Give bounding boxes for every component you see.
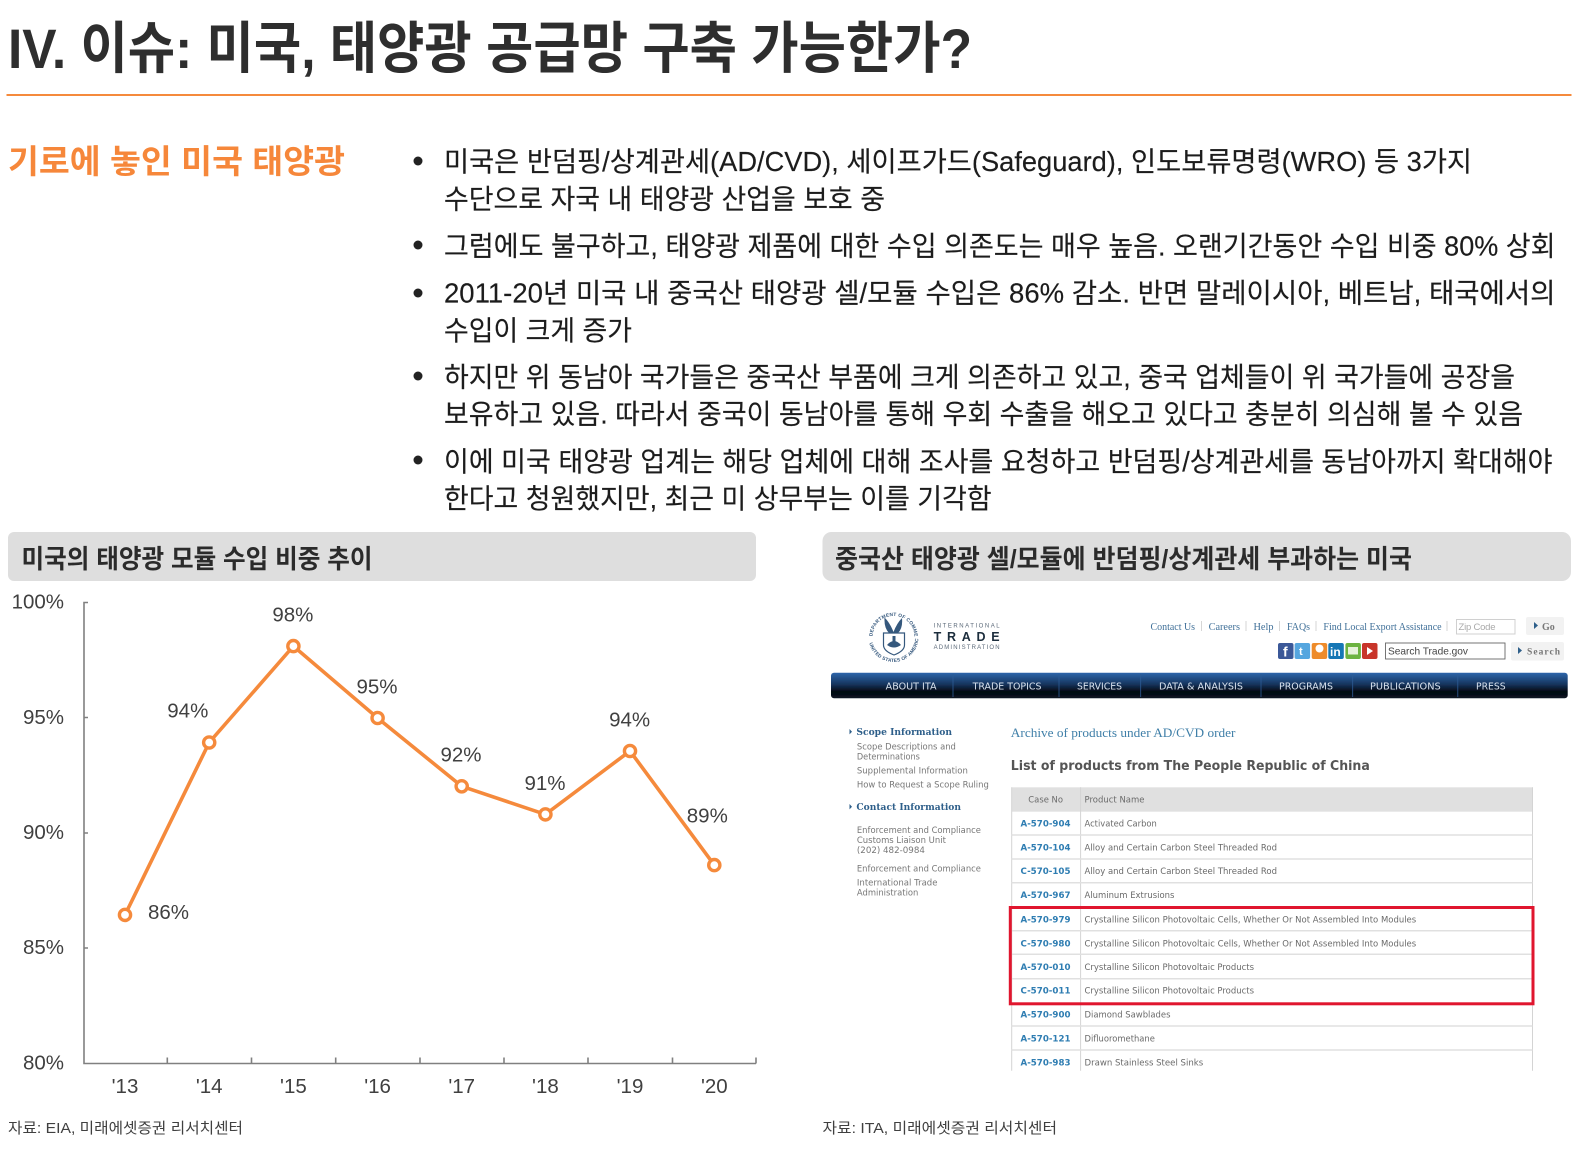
data labels: 86% [148, 901, 189, 924]
data labels: 92% [440, 744, 482, 766]
bullet 1: 미국은 반덤핑/상계관세(AD/CVD), 세이프가드(Safeguard), 인도보류명령(WRO) 등 3가지 [444, 146, 1472, 177]
y axis labels: 100% [12, 590, 64, 613]
table rows: Alloy and Certain Carbon Steel Threaded Rod [1084, 843, 1277, 853]
panel heading: left: 미국의 태양광 모듈 수입 비중 추이 [22, 544, 372, 574]
table rows: C-570-011 [1020, 987, 1070, 997]
data labels: 94% [167, 699, 208, 722]
table rows: Drawn Stainless Steel Sinks [1084, 1058, 1204, 1068]
bullet 1: 수단으로 자국 내 태양광 산업을 보호 중 [444, 183, 885, 214]
products table: Case No [1028, 795, 1063, 805]
icon: department of commerce seal: DEPARTMENT OF COMMERCE [869, 612, 918, 636]
data labels: 91% [524, 772, 566, 795]
search button [1511, 642, 1564, 660]
sidebar: Contact Information [856, 802, 961, 813]
bullet 3: 2011-20년 미국 내 중국산 태양광 셀/모듈 수입은 86% 감소. 반면 말레이시아, 베트남, 태국에서의 [444, 278, 1556, 308]
y axis labels [12, 590, 64, 1074]
x axis labels: '15 [280, 1075, 307, 1098]
sidebar: Scope Descriptions and [857, 743, 956, 753]
x axis labels: '20 [701, 1075, 728, 1098]
navigation bar: PROGRAMS [1279, 682, 1333, 692]
ITA logo [830, 612, 1000, 676]
top links [1150, 621, 1447, 633]
bullet 3: 수입이 크게 증가 [444, 315, 632, 346]
x axis labels: '18 [532, 1075, 559, 1098]
red highlight box [1010, 908, 1533, 1004]
subheading: orange: 기로에 놓인 미국 태양광 [8, 143, 345, 180]
table rows: Activated Carbon [1084, 819, 1157, 829]
bullet 4: 하지만 위 동남아 국가들은 중국산 부품에 크게 의존하고 있고, 중국 업체들이 위 국가들에 공장을 [444, 362, 1515, 393]
sidebar: Administration [857, 889, 918, 899]
bullet 4: 보유하고 있음. 따라서 중국이 동남아를 통해 우회 수출을 해오고 있다고 충분히 의심해 볼 수 있음 [444, 398, 1523, 429]
social icons: in [1330, 645, 1341, 659]
table rows: Alloy and Certain Carbon Steel Threaded Rod [1084, 867, 1277, 877]
panel: left chart [8, 532, 756, 1137]
top links: Contact Us [1150, 622, 1195, 633]
x axis labels: '14 [196, 1075, 223, 1098]
line chart [12, 590, 756, 1098]
sidebar: Scope Information [856, 727, 952, 738]
top links: Help [1254, 622, 1274, 633]
top links: Careers [1209, 622, 1240, 633]
zip code field [1456, 620, 1515, 634]
navigation bar: ABOUT ITA [886, 682, 937, 692]
bullet 5: 한다고 청원했지만, 최근 미 상무부는 이를 기각함 [444, 483, 992, 514]
table rows: A-570-979 [1020, 915, 1070, 925]
navigation bar: SERVICES [1077, 682, 1122, 692]
x axis labels: '19 [617, 1075, 643, 1098]
y axis labels: 90% [23, 821, 64, 844]
navigation bar: PRESS [1476, 682, 1506, 692]
source note: left: 자료: EIA, 미래에셋증권 리서치센터 [8, 1120, 243, 1137]
x axis labels: '17 [448, 1075, 475, 1098]
social icons: f [1283, 644, 1288, 660]
ITA wordmark: INTERNATIONAL [934, 624, 1000, 630]
table rows: Crystalline Silicon Photovoltaic Cells, Whether Or Not Assembled Into Modules [1084, 939, 1417, 949]
navigation bar [831, 673, 1568, 698]
go button [1526, 617, 1564, 635]
ITA wordmark: ADMINISTRATION [934, 645, 1000, 651]
y axis labels: 80% [23, 1052, 64, 1074]
archive heading: Archive of products under AD/CVD order [1011, 726, 1236, 740]
x axis labels: '13 [112, 1075, 138, 1098]
sidebar: Enforcement and Compliance [857, 826, 981, 836]
products table: Product Name [1084, 795, 1144, 805]
zip code field: Zip Code [1458, 622, 1496, 633]
table rows: A-570-104 [1020, 843, 1070, 853]
table rows: Crystalline Silicon Photovoltaic Products [1084, 987, 1254, 997]
title rule [6, 94, 1572, 96]
top links: Find Local Export Assistance [1323, 622, 1442, 633]
sidebar: International Trade [857, 879, 938, 889]
social icons [1278, 643, 1378, 660]
bullet list [414, 146, 1556, 514]
x axis labels [112, 1075, 728, 1098]
sidebar: How to Request a Scope Ruling [857, 781, 989, 791]
table rows: Diamond Sawblades [1084, 1011, 1171, 1021]
table rows: A-570-904 [1020, 819, 1070, 829]
panel heading: right [822, 532, 1571, 581]
x axis labels: '16 [364, 1075, 391, 1098]
social icons: t [1299, 646, 1303, 658]
go button: Go [1542, 622, 1555, 633]
data markers [119, 640, 720, 921]
panel heading: right: 중국산 태양광 셀/모듈에 반덤핑/상계관세 부과하는 미국 [835, 544, 1412, 574]
table rows: Crystalline Silicon Photovoltaic Cells, Whether Or Not Assembled Into Modules [1084, 915, 1417, 925]
table rows: A-570-983 [1020, 1058, 1070, 1068]
source note: right: 자료: ITA, 미래에셋증권 리서치센터 [822, 1120, 1057, 1137]
data labels: 89% [687, 804, 728, 828]
top links: FAQs [1287, 622, 1310, 633]
ITA wordmark [934, 624, 1000, 651]
bullet 2: 그럼에도 불구하고, 태양광 제품에 대한 수입 의존도는 매우 높음. 오랜기간동안 수입 비중 80% 상회 [444, 230, 1556, 261]
table rows: Difluoromethane [1084, 1034, 1155, 1044]
sidebar: Customs Liaison Unit [857, 836, 947, 846]
navigation bar: DATA & ANALYSIS [1159, 682, 1243, 692]
table rows: C-570-980 [1020, 939, 1070, 949]
table rows: Crystalline Silicon Photovoltaic Products [1084, 963, 1254, 973]
list heading: List of products from The People Republic of China [1011, 759, 1370, 774]
navigation bar: TRADE TOPICS [972, 682, 1042, 692]
bullet 5: 이에 미국 태양광 업계는 해당 업체에 대해 조사를 요청하고 반덤핑/상계관세를 동남아까지 확대해야 [444, 446, 1552, 477]
table rows: A-570-967 [1020, 891, 1070, 901]
sidebar: Determinations [857, 753, 920, 763]
y axis labels: 95% [23, 706, 64, 729]
sidebar: Enforcement and Compliance [857, 865, 981, 875]
navigation bar: PUBLICATIONS [1370, 682, 1441, 692]
sidebar [850, 727, 989, 899]
panel heading: left [8, 532, 756, 581]
sidebar: Supplemental Information [857, 767, 968, 777]
bullet 5 [414, 446, 1552, 514]
table rows [1020, 819, 1417, 1068]
y axis labels: 85% [23, 936, 64, 959]
chart axes [84, 602, 756, 1064]
title: IV. 이슈: 미국, 태양광 공급망 구축 가능한가? [8, 17, 972, 80]
table rows: A-570-121 [1020, 1034, 1070, 1044]
ITA wordmark: TRADE [934, 630, 1000, 644]
search button: Search [1527, 648, 1561, 658]
bullet 4 [414, 362, 1523, 429]
data labels: 95% [356, 676, 398, 698]
data labels: 98% [272, 604, 313, 626]
icon: department of commerce seal [830, 612, 918, 676]
table rows: A-570-010 [1020, 963, 1070, 973]
table rows: C-570-105 [1020, 867, 1070, 877]
sidebar: (202) 482-0984 [857, 846, 925, 856]
search field [1386, 643, 1505, 659]
bullet 1 [414, 146, 1472, 214]
data labels [148, 604, 728, 924]
data line [125, 646, 714, 915]
search field: Search Trade.gov [1388, 646, 1469, 658]
table rows: A-570-900 [1020, 1011, 1070, 1021]
bullet 3 [414, 278, 1556, 346]
icon: department of commerce seal: UNITED STATES OF AMERICA [870, 638, 918, 662]
table rows: Aluminum Extrusions [1084, 891, 1175, 901]
data labels: 94% [609, 708, 650, 732]
products table [1012, 787, 1532, 1071]
